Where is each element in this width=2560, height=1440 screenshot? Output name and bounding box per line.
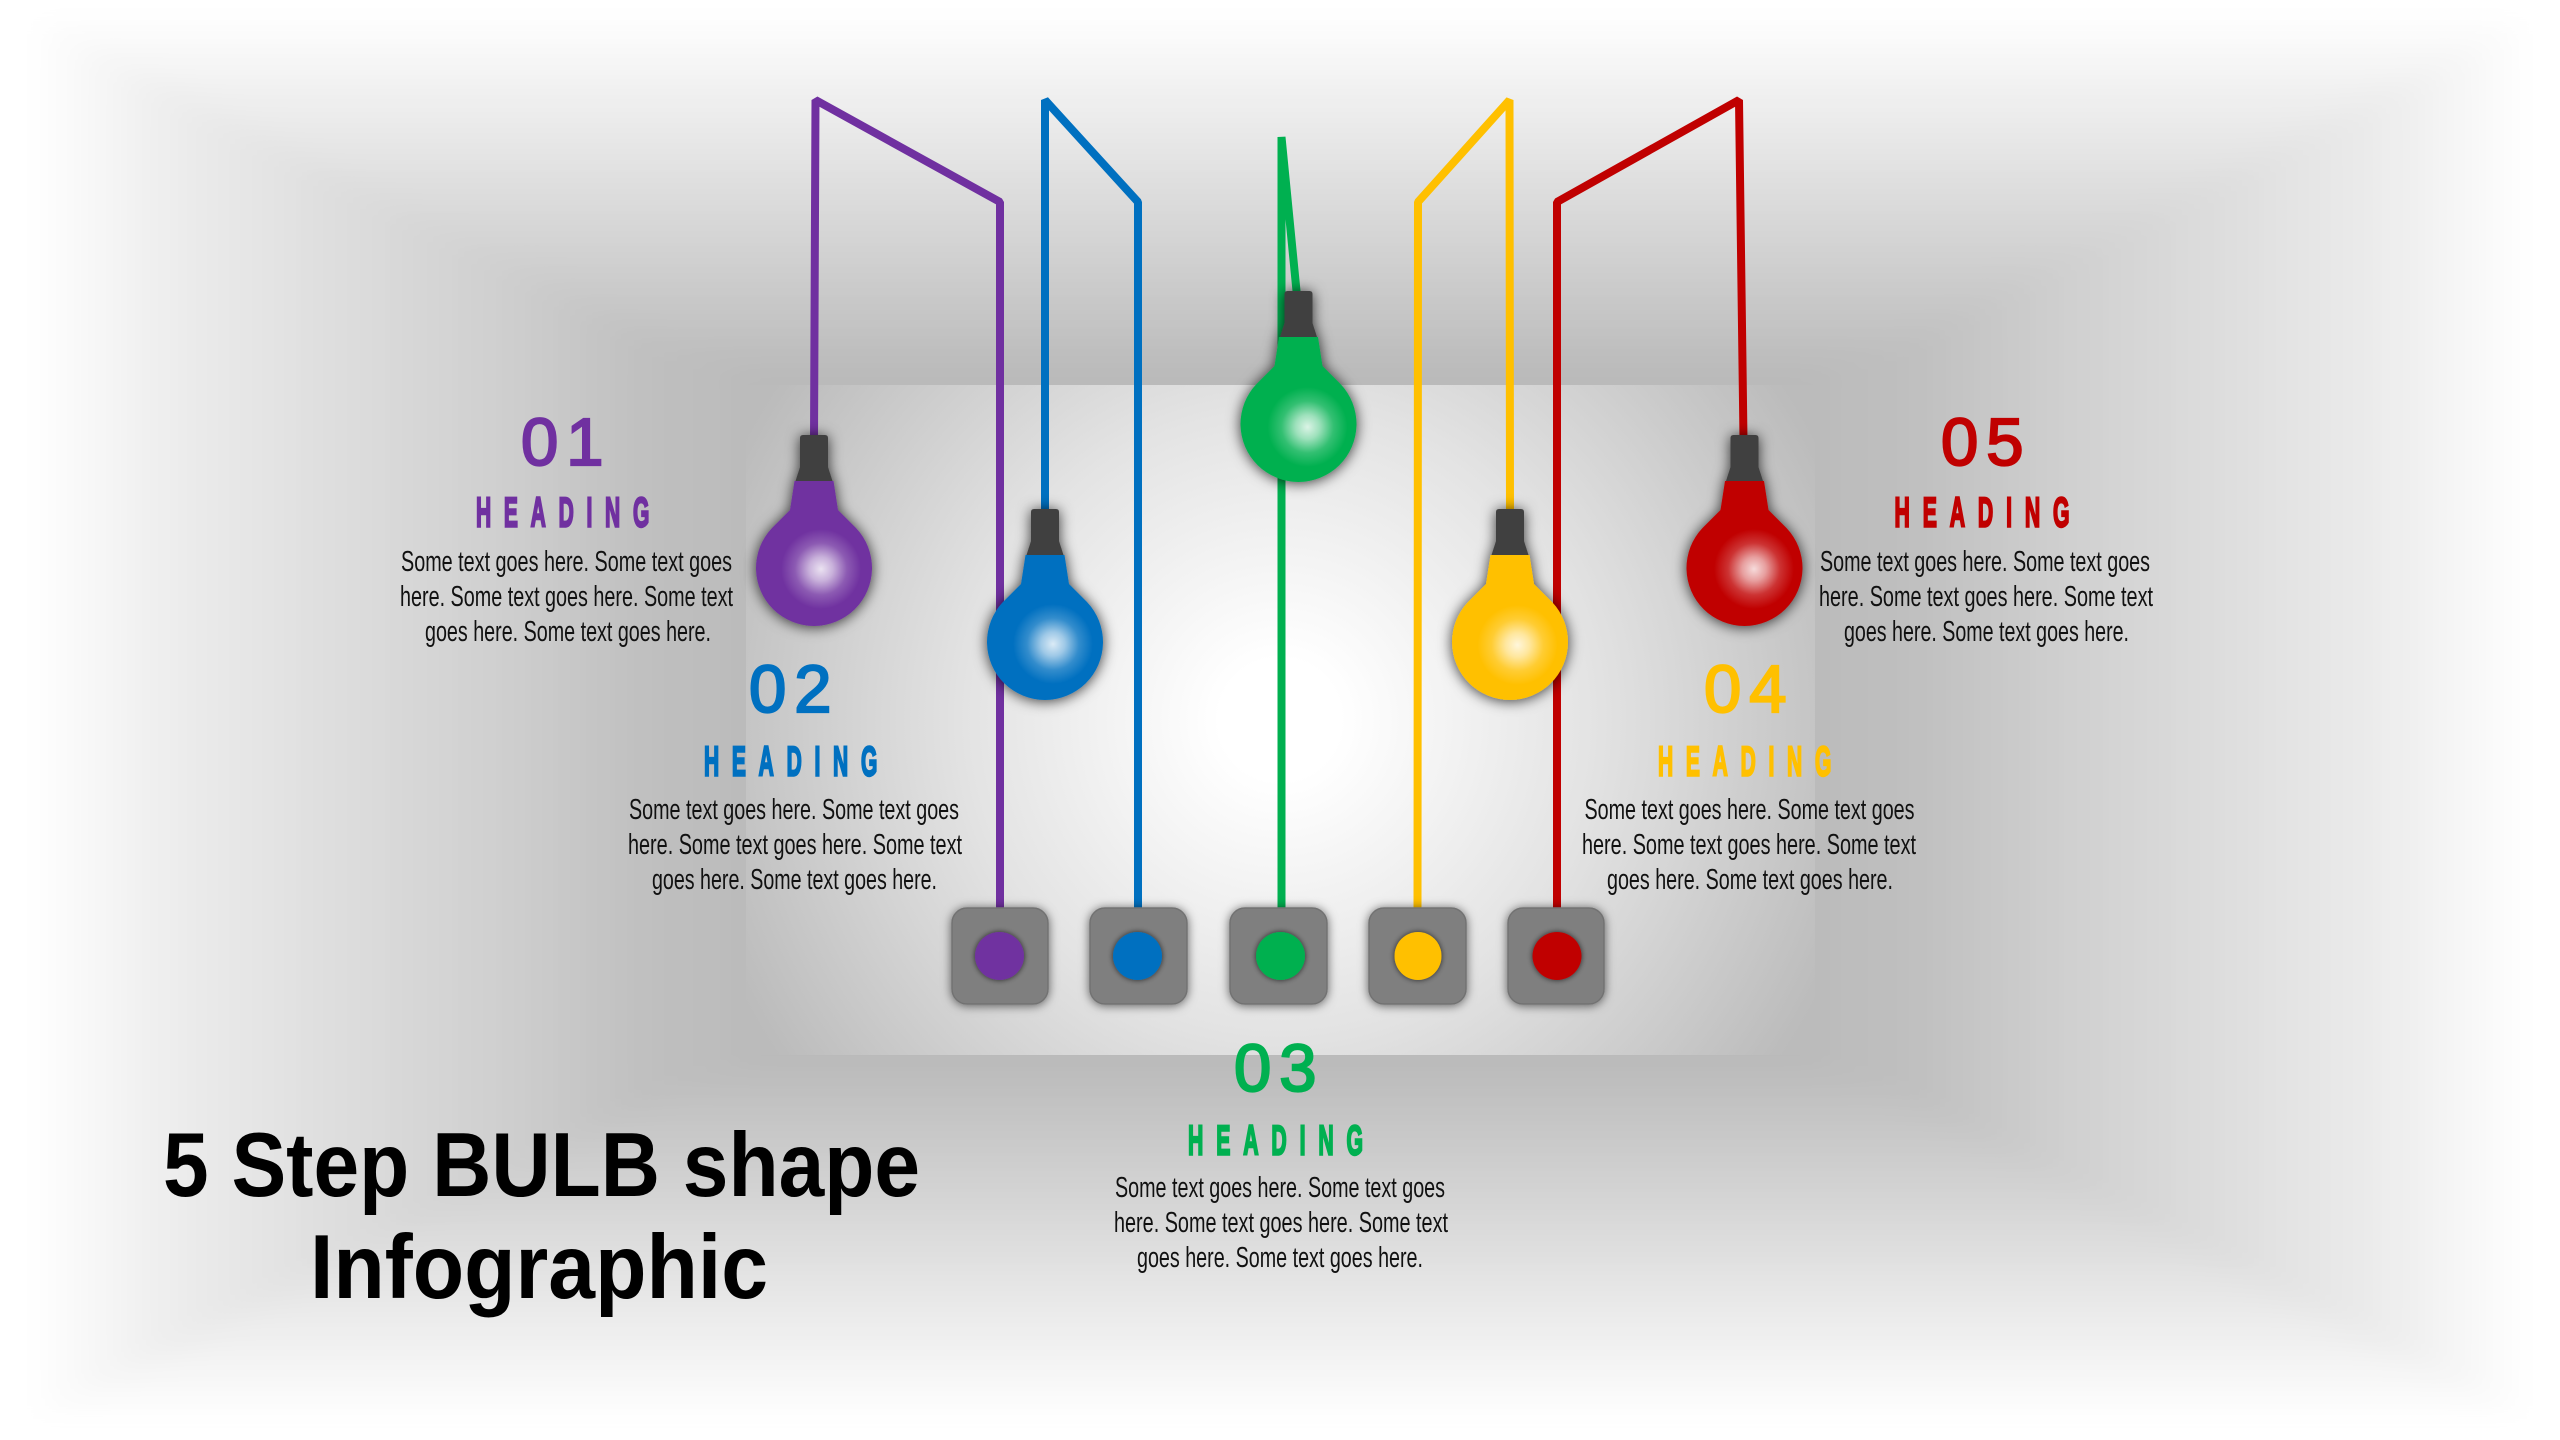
switch: blue [1090, 908, 1187, 1004]
body 03: goes here. Some text goes here. [1137, 1242, 1423, 1274]
switch: red [1508, 908, 1604, 1004]
body 05: Some text goes here. Some text goes [1820, 546, 2150, 578]
step 02 text [628, 652, 962, 896]
body 02: goes here. Some text goes here. [652, 864, 937, 896]
number 02: 02 [749, 652, 840, 727]
number 03: 03 [1234, 1031, 1325, 1106]
heading 03: HEADING [1188, 1118, 1376, 1165]
wire: blue [1045, 100, 1138, 912]
wire: yellow [1418, 100, 1510, 912]
body 03 [1114, 1172, 1448, 1274]
switch: purple [952, 908, 1048, 1004]
step 05 text [1819, 405, 2153, 648]
heading 01: HEADING [476, 490, 662, 537]
body 02 [628, 794, 962, 896]
bulb 4: yellow [1452, 509, 1568, 700]
body 05: goes here. Some text goes here. [1844, 616, 2129, 648]
wire: green [1282, 137, 1297, 912]
bulb 3: green [1240, 291, 1356, 482]
body 02: Some text goes here. Some text goes [629, 794, 959, 826]
wire: red [1557, 100, 1744, 912]
body 04 [1582, 794, 1916, 896]
bulb 1: purple [756, 435, 872, 626]
heading 04: HEADING [1658, 739, 1844, 786]
bulb 5: red [1686, 435, 1802, 626]
switch panel [952, 908, 1604, 1004]
switch: yellow [1369, 908, 1466, 1004]
body 01 [400, 546, 733, 648]
body 04: goes here. Some text goes here. [1607, 864, 1893, 896]
heading 02: HEADING [704, 739, 890, 786]
bulb 2: blue [987, 509, 1103, 700]
number 05: 05 [1941, 405, 2032, 480]
step 01 text [400, 405, 733, 648]
step 04 text [1582, 652, 1916, 896]
body 05 [1819, 546, 2153, 648]
heading 05: HEADING [1894, 490, 2082, 537]
body 03: here. Some text goes here. Some text [1114, 1207, 1448, 1239]
body 01: goes here. Some text goes here. [425, 616, 711, 648]
switch: green [1230, 908, 1327, 1004]
body 04: here. Some text goes here. Some text [1582, 829, 1916, 861]
wires [814, 100, 1744, 912]
body 01: Some text goes here. Some text goes [401, 546, 732, 578]
number 04: 04 [1704, 652, 1795, 727]
wire: purple [814, 100, 1000, 912]
number 01: 01 [521, 405, 612, 480]
title: Infographic [310, 1217, 768, 1318]
body 05: here. Some text goes here. Some text [1819, 581, 2153, 613]
step 03 text [1114, 1031, 1448, 1274]
body 02: here. Some text goes here. Some text [628, 829, 962, 861]
title [163, 1115, 920, 1318]
title: 5 Step BULB shape [163, 1115, 920, 1216]
body 04: Some text goes here. Some text goes [1584, 794, 1914, 826]
body 01: here. Some text goes here. Some text [400, 581, 733, 613]
body 03: Some text goes here. Some text goes [1115, 1172, 1445, 1204]
